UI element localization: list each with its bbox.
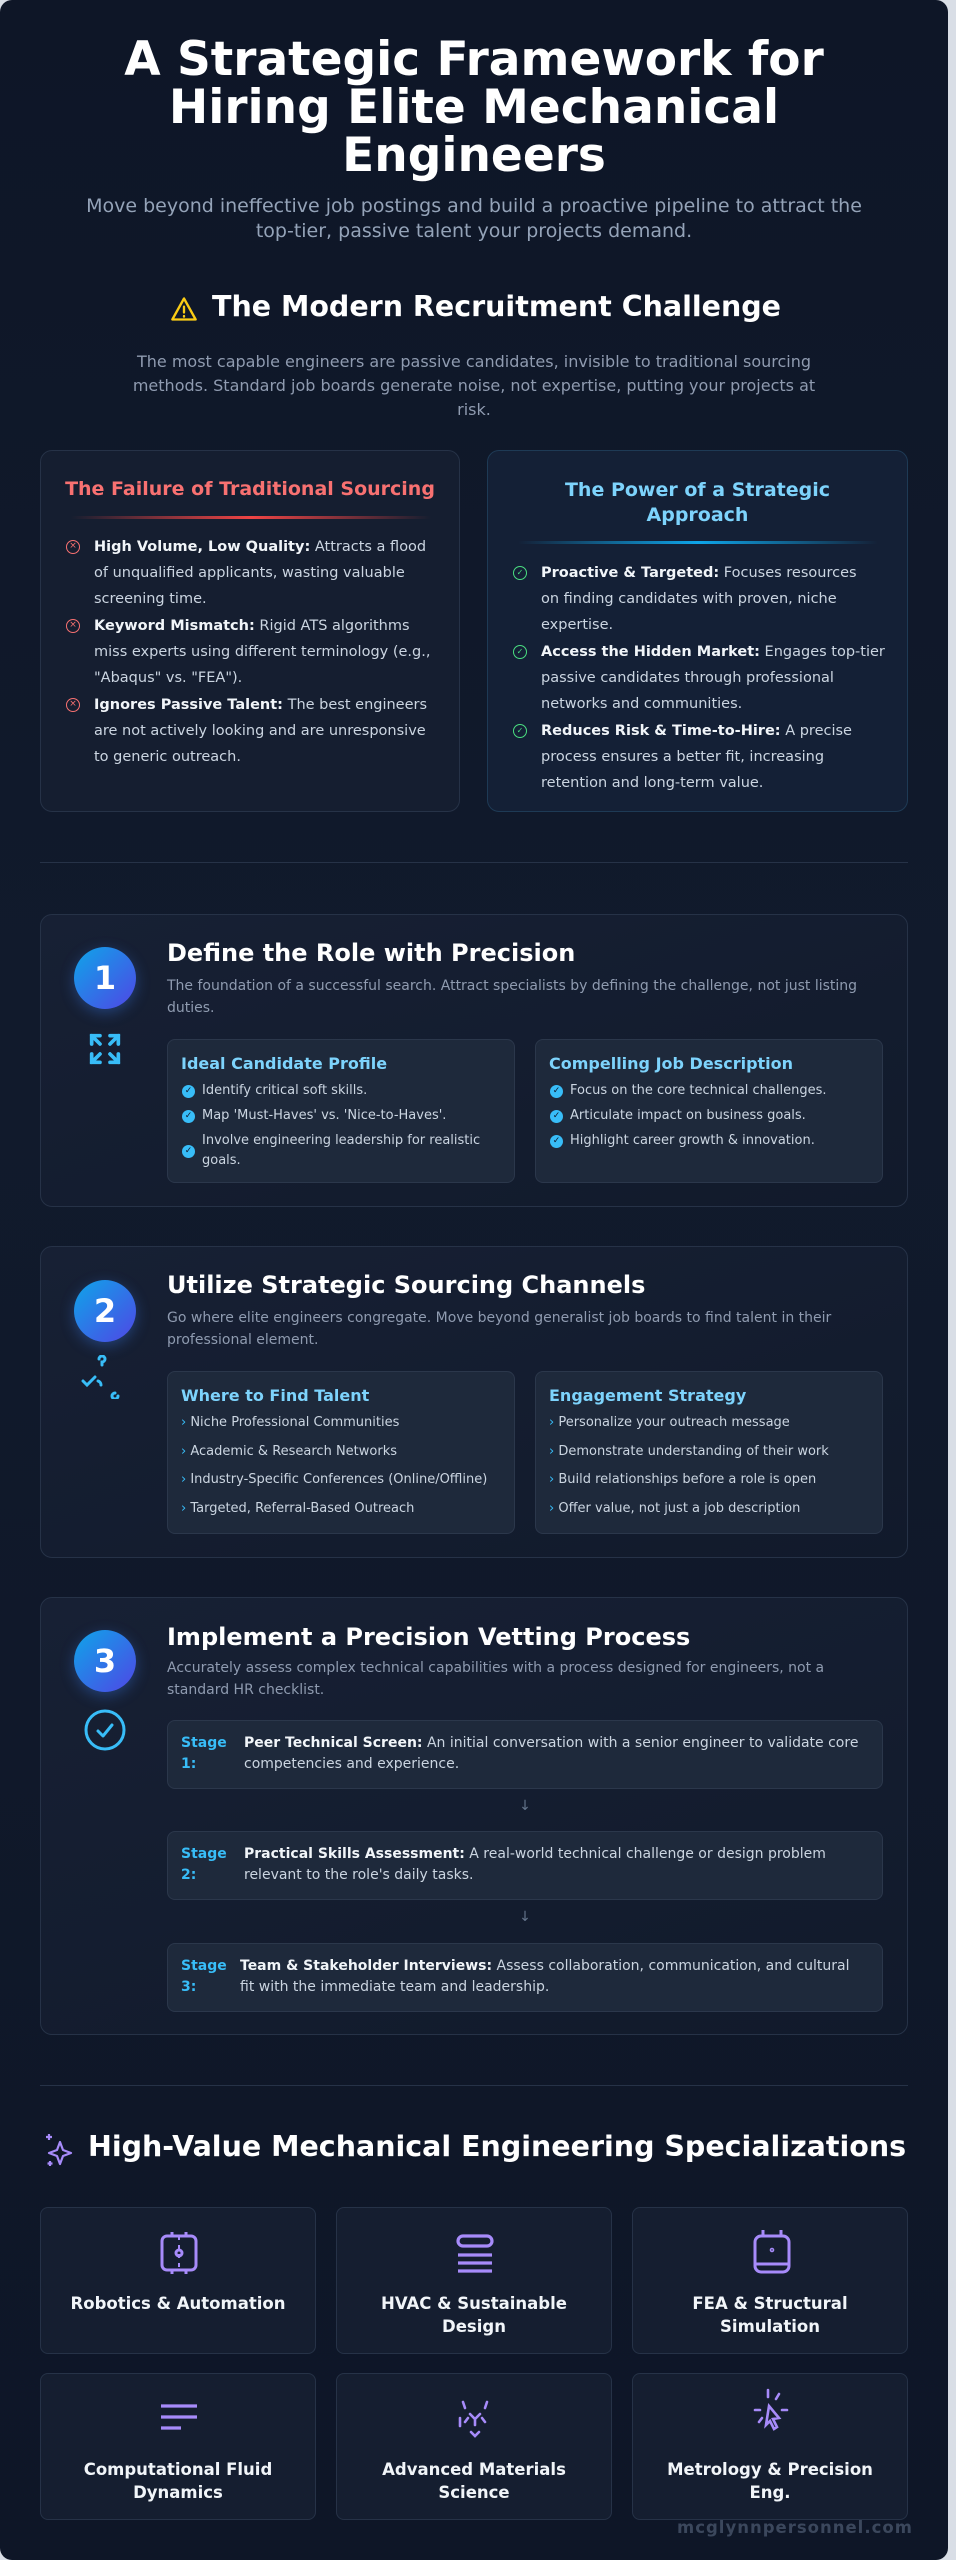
box: where to find talent: › Industry-Specific Conferences (Online/Offline) [181,1472,487,1487]
panel: power of strategic approach [487,450,908,812]
footer: website: mcglynnpersonnel.com [677,2518,913,2537]
stage 2 [167,1831,883,1900]
tile: cfd: Dynamics [133,2483,223,2502]
heading: The Power of a Strategic [565,479,830,501]
box: ideal candidate profile: Ideal Candidate Profile [181,1054,387,1073]
number badge 3: 3 [94,1642,116,1680]
icon: expand arrows [90,1034,120,1064]
tile: metrology: Eng. [749,2483,791,2502]
step title: Define the Role with Precision [167,939,575,967]
tile: fea: Simulation [720,2317,820,2336]
panel: failure of traditional sourcing: × [69,541,77,551]
step description: The foundation of a successful search. Attract specialists by defining the challenge, not just listing duties. [167,978,857,1016]
tile: materials [336,2373,612,2520]
tile: fea: FEA & Structural [692,2294,848,2313]
number badge 2 [74,1280,136,1342]
stages [167,1720,883,2012]
item: Ignores Passive Talent: The best engineers are not actively looking and are unresponsive to generic outreach. [94,697,427,765]
panel: step 3 [40,1597,908,2035]
item: Proactive & Targeted: Focuses resources on finding candidates with proven, niche expertise. [541,565,857,633]
box: engagement strategy: › Build relationships before a role is open [549,1472,816,1487]
subtitle: Move beyond ineffective job postings and build a proactive pipeline to attract the top-tier, passive talent your projects demand. [86,195,862,242]
heading [565,479,830,526]
panel: step 2 [40,1246,908,1558]
stage 1: Stage 1: [181,1735,227,1772]
panel: power of strategic approach: ✓ [517,647,523,656]
heading: The Failure of Traditional Sourcing [65,478,435,500]
item: Access the Hidden Market: Engages top-tier passive candidates through professional networks and communities. [541,644,885,712]
box: where to find talent: › Academic & Research Networks [181,1444,397,1459]
box: compelling job description: Compelling Job Description [549,1054,793,1073]
box: compelling job description: Focus on the core technical challenges. [570,1083,827,1098]
box: where to find talent: › Niche Professional Communities [181,1415,399,1430]
box: where to find talent: Where to Find Talent [181,1386,369,1405]
tile: metrology [632,2373,908,2520]
stage 3: Team & Stakeholder Interviews: Assess collaboration, communication, and cultural fit with the immediate team and leadership. [240,1958,849,1995]
box: compelling job description: ✓ [553,1086,560,1096]
box: compelling job description: Articulate impact on business goals. [570,1108,806,1123]
section heading: challenge: The Modern Recruitment Challenge [212,290,781,323]
tile: materials: Science [438,2483,510,2502]
stage 1 [167,1720,883,1789]
box: ideal candidate profile: ✓ [185,1146,192,1156]
box: compelling job description: ✓ [553,1136,560,1146]
heading: Approach [647,504,748,526]
step title: Implement a Precision Vetting Process [167,1623,690,1651]
tile: fea [632,2207,908,2354]
stage 1: Peer Technical Screen: An initial conversation with a senior engineer to validate core competencies and experience. [244,1735,858,1772]
box: engagement strategy: › Offer value, not just a job description [549,1501,800,1516]
step description: Accurately assess complex technical capabilities with a process designed for engineers, not a standard HR checklist. [167,1660,824,1698]
box: where to find talent [167,1371,515,1534]
step description: Go where elite engineers congregate. Move beyond generalist job boards to find talent in their professional element. [167,1310,831,1348]
panel: failure of traditional sourcing: × [69,620,77,630]
box: compelling job description [535,1039,883,1183]
box: engagement strategy: Engagement Strategy [549,1386,746,1405]
panel: power of strategic approach: ✓ [517,568,523,577]
item: High Volume, Low Quality: Attracts a flood of unqualified applicants, wasting valuable screening time. [94,539,426,607]
stage 3: Stage 3: [181,1958,227,1995]
stage 3 [167,1943,883,2012]
tile: materials: Advanced Materials [382,2460,566,2479]
arrow: ↓ [519,1909,531,1925]
panel: power of strategic approach: ✓ [517,726,523,735]
tile: robotics [40,2207,316,2354]
icon: check circle [84,1710,126,1750]
title: A Strategic Framework for Hiring Elite Mechanical Engineers [124,32,824,183]
stage 2: Practical Skills Assessment: A real-world technical challenge or design problem relevant to the role's daily tasks. [244,1846,826,1883]
panel: step 1 [40,914,908,1207]
box: compelling job description: ✓ [553,1111,560,1121]
number badge 2: 2 [94,1292,116,1330]
tile: cfd [40,2373,316,2520]
stage 2: Stage 2: [181,1846,227,1883]
tile: cfd: Computational Fluid [84,2460,272,2479]
box: compelling job description: Highlight career growth & innovation. [570,1133,815,1148]
tile: metrology: Metrology & Precision [667,2460,873,2479]
box: ideal candidate profile: ✓ [185,1111,192,1121]
item: Reduces Risk & Time-to-Hire: A precise process ensures a better fit, increasing retention and long-term value. [541,723,852,791]
box: where to find talent: › Targeted, Referral-Based Outreach [181,1501,414,1516]
icon: route [81,1355,120,1399]
box: ideal candidate profile: ✓ [185,1086,192,1096]
box: ideal candidate profile: Map 'Must-Haves' vs. 'Nice-to-Haves'. [202,1108,446,1123]
panel: failure of traditional sourcing: × [69,699,77,709]
step title: Utilize Strategic Sourcing Channels [167,1271,645,1299]
box: engagement strategy: › Demonstrate understanding of their work [549,1444,829,1459]
item: Keyword Mismatch: Rigid ATS algorithms miss experts using different terminology (e.g., "Abaqus" vs. "FEA"). [94,618,430,686]
box: ideal candidate profile [167,1039,515,1183]
number badge 3 [74,1630,136,1692]
tile: hvac: Design [442,2317,506,2336]
tile: hvac [336,2207,612,2354]
tile: hvac: HVAC & Sustainable [381,2294,567,2313]
heading: specializations: High-Value Mechanical Engineering Specializations [88,2130,906,2163]
icon: warning [171,297,197,321]
box: ideal candidate profile: Identify critical soft skills. [202,1083,367,1098]
number badge 1: 1 [94,959,116,997]
icon: sparkles [46,2134,72,2166]
box: engagement strategy: › Personalize your outreach message [549,1415,790,1430]
arrow: ↓ [519,1798,531,1814]
number badge 1 [74,947,136,1009]
tile: robotics: Robotics & Automation [71,2294,285,2313]
box: ideal candidate profile: Involve engineering leadership for realistic goals. [202,1133,480,1168]
box: engagement strategy [535,1371,883,1534]
panel: failure of traditional sourcing [40,450,460,812]
intro paragraph: The most capable engineers are passive candidates, invisible to traditional sourcing methods. Standard job boards generate noise, not expertise, putting your projects at risk. [133,352,815,419]
